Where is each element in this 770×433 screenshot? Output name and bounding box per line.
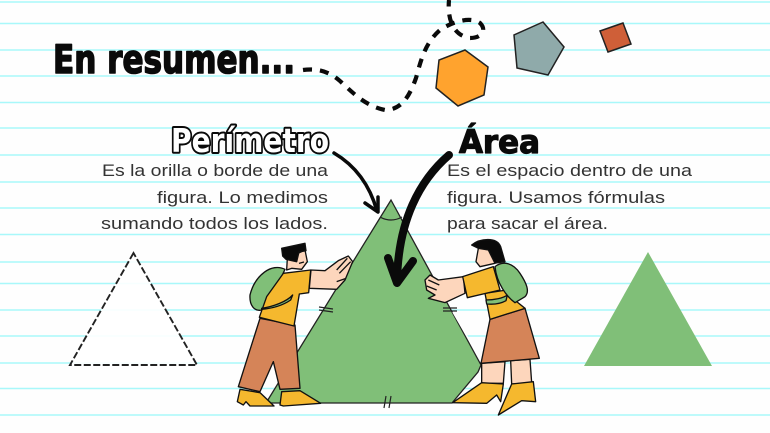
text block: área: Es el espacio dentro de una <box>447 162 693 180</box>
central triangle <box>266 200 483 408</box>
person: woman <box>425 240 539 415</box>
text block: perímetro: Es la orilla o borde de una <box>102 162 329 180</box>
text block: perímetro <box>101 162 329 233</box>
solid green triangle <box>584 252 712 366</box>
hexagon <box>436 50 488 106</box>
text block: área <box>447 162 693 233</box>
text block: perímetro: figura. Lo medimos <box>157 189 328 207</box>
text block: área: figura. Usamos fórmulas <box>447 189 665 207</box>
square <box>600 23 631 52</box>
pentagon <box>514 22 564 75</box>
arrow: perímetro <box>334 153 378 212</box>
person: man <box>237 243 353 406</box>
dashed path <box>303 0 483 110</box>
heading: Área: Área <box>459 123 540 161</box>
heading: Perímetro: Perímetro <box>171 121 329 160</box>
text block: área: para sacar el área. <box>447 215 608 233</box>
title: En resumen... <box>53 38 295 83</box>
arrow: área <box>388 155 449 283</box>
text block: perímetro: sumando todos los lados. <box>101 215 328 233</box>
dashed triangle <box>70 253 197 365</box>
